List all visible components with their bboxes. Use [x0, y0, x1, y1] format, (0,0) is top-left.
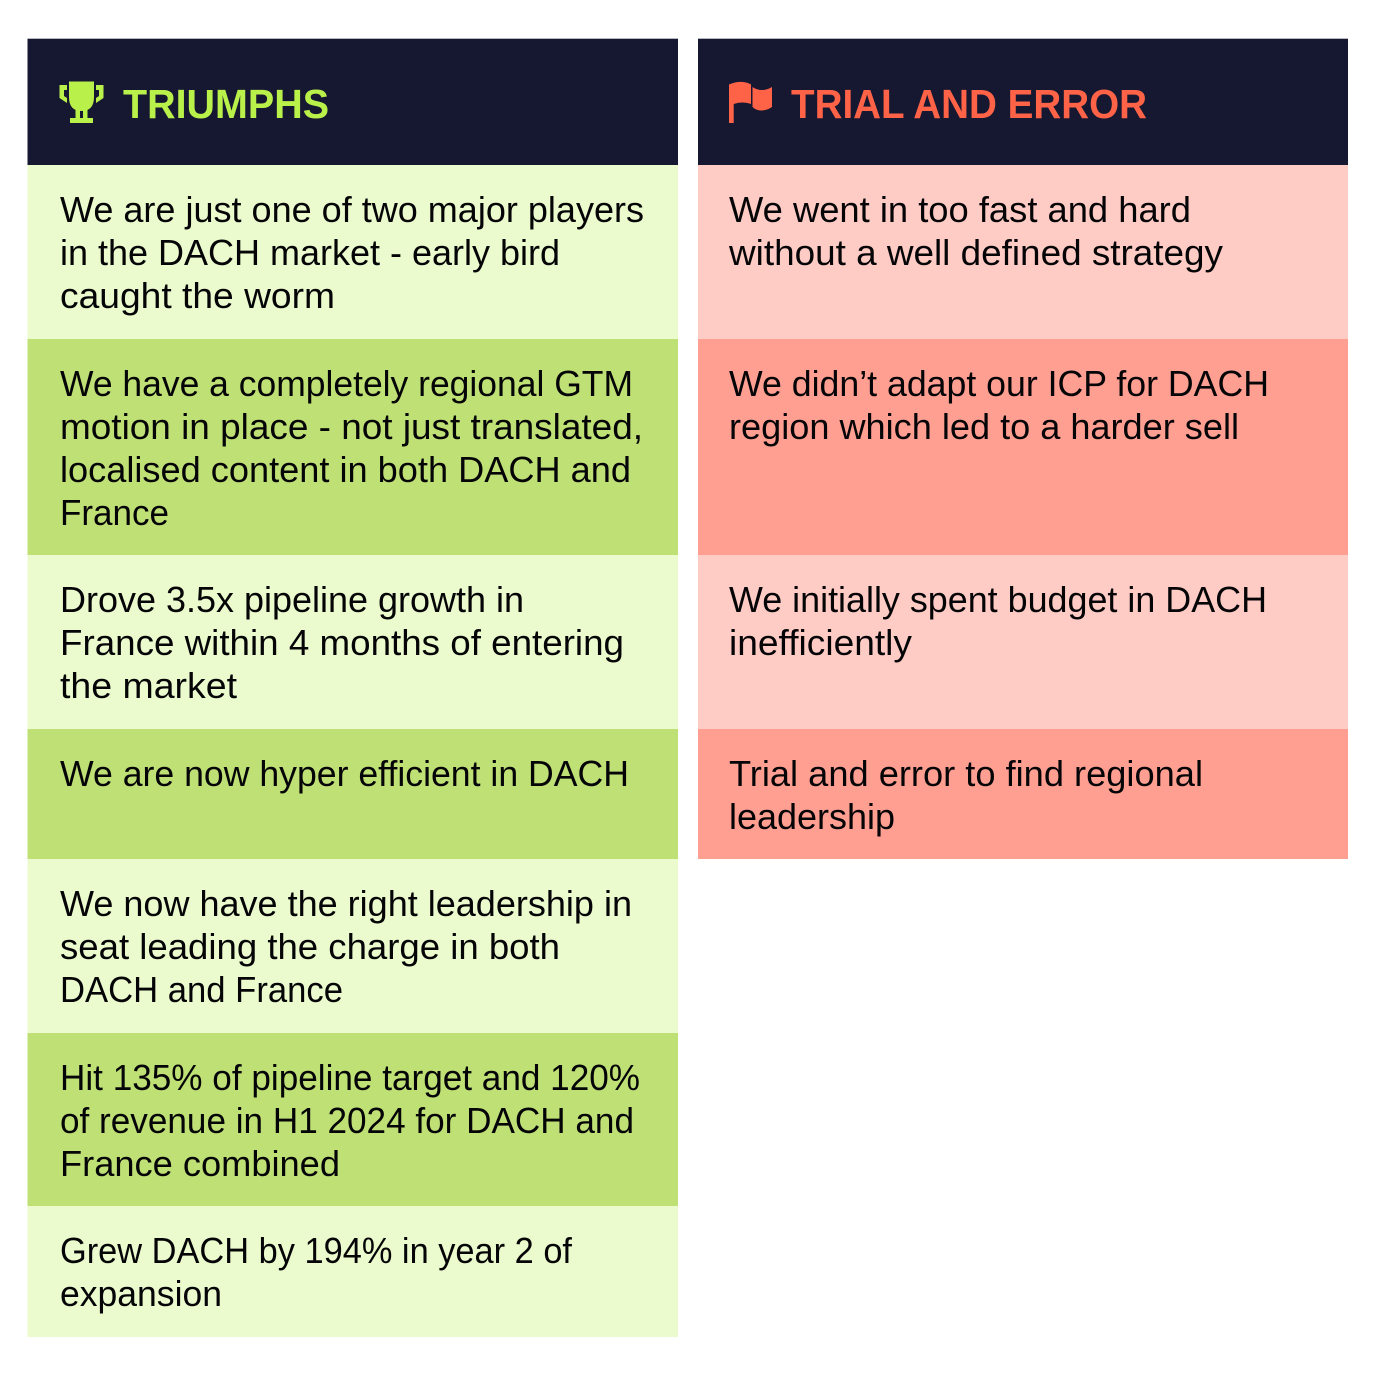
row: DACH growth: Grew DACH by 194% in year 2 of	[60, 1230, 573, 1271]
row: too fast: We went in too fast and hard	[729, 189, 1191, 230]
row: pipeline target: Hit 135% of pipeline target and 120%	[60, 1057, 640, 1098]
panel: triumphs	[28, 39, 678, 1337]
row: pipeline growth: Drove 3.5x pipeline growth in	[60, 579, 524, 620]
row: hyper efficient	[28, 729, 678, 859]
row: early bird: in the DACH market - early bird	[60, 232, 560, 273]
panel: trial and error	[698, 39, 1348, 859]
icon: trophy	[60, 82, 104, 123]
row: hyper efficient: We are now hyper efficient in DACH	[60, 753, 629, 794]
row: early bird: caught the worm	[60, 275, 335, 316]
row: ICP: region which led to a harder sell	[729, 406, 1239, 447]
row: pipeline target: France combined	[60, 1143, 340, 1184]
row: regional leadership	[698, 729, 1348, 859]
row: leadership: seat leading the charge in both	[60, 926, 560, 967]
trial and error header	[698, 39, 1348, 165]
icon: flag	[729, 82, 772, 123]
row: regional GTM: motion in place - not just translated,	[60, 406, 643, 447]
row: regional GTM: We have a completely regional GTM	[60, 363, 633, 404]
row: regional GTM	[28, 339, 678, 555]
triumphs heading: TRIUMPHS	[123, 81, 329, 127]
row: early bird	[28, 165, 678, 339]
row: pipeline growth: France within 4 months of entering	[60, 622, 624, 663]
row: regional GTM: localised content in both DACH and	[60, 449, 631, 490]
row: budget: We initially spent budget in DACH	[729, 579, 1267, 620]
row: regional leadership: Trial and error to find regional	[729, 753, 1203, 794]
row: pipeline growth: the market	[60, 665, 237, 706]
triumphs header	[28, 39, 678, 165]
row: budget	[698, 555, 1348, 729]
row: too fast: without a well defined strategy	[728, 232, 1223, 273]
row: leadership	[28, 859, 678, 1033]
row: pipeline growth	[28, 555, 678, 729]
row: DACH growth: expansion	[60, 1273, 222, 1314]
row: leadership: DACH and France	[60, 969, 343, 1010]
row: pipeline target	[28, 1033, 678, 1206]
row: regional GTM: France	[60, 492, 169, 533]
row: ICP	[698, 339, 1348, 555]
row: early bird: We are just one of two major players	[60, 189, 644, 230]
row: leadership: We now have the right leadership in	[60, 883, 632, 924]
row: DACH growth	[28, 1206, 678, 1337]
row: budget: inefficiently	[729, 622, 912, 663]
row: too fast	[698, 165, 1348, 339]
row: ICP: We didn’t adapt our ICP for DACH	[729, 363, 1269, 404]
row: pipeline target: of revenue in H1 2024 for DACH and	[60, 1100, 634, 1141]
row: regional leadership: leadership	[729, 796, 895, 837]
trial and error heading: TRIAL AND ERROR	[791, 81, 1147, 127]
